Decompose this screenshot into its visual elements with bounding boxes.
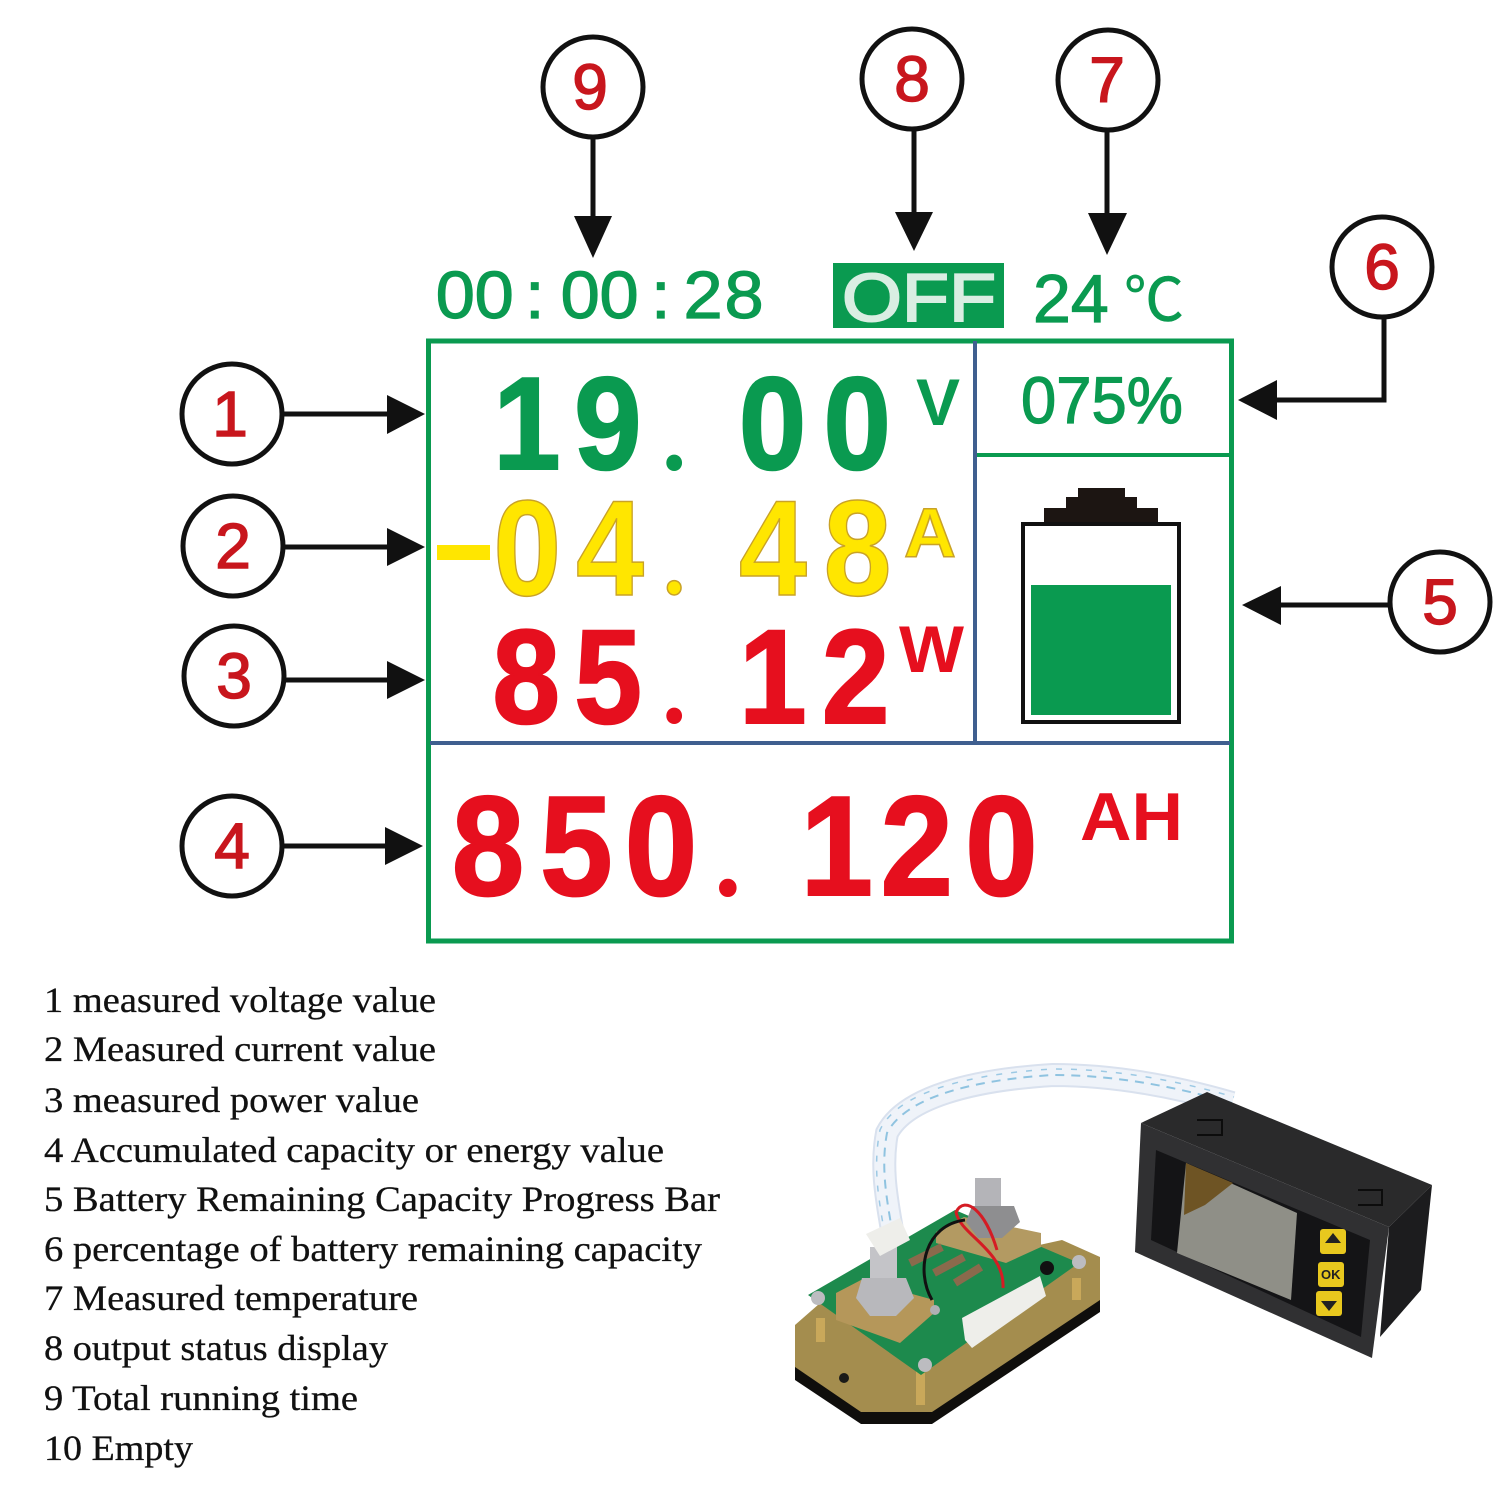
meter housing	[1135, 1092, 1432, 1358]
accumulated capacity reading: 850	[452, 766, 697, 925]
current reading: A	[904, 494, 956, 572]
callout 9 with arrow: total running time: 9	[572, 51, 608, 123]
voltage reading: .	[662, 382, 686, 491]
brass shunt with rods	[836, 1217, 1041, 1343]
status row: running time: 00:00:28	[436, 258, 764, 333]
current reading: 48	[739, 473, 892, 624]
callout 9 with arrow: total running time	[543, 37, 643, 258]
legend list: 5 Battery Remaining Capacity Progress Bar	[44, 1179, 720, 1219]
callout 7 with arrow: temperature: 7	[1089, 44, 1125, 116]
white connectors	[866, 1218, 1046, 1348]
voltage reading: 00	[739, 349, 891, 497]
legend list: 2 Measured current value	[44, 1029, 436, 1069]
callout 7 with arrow: temperature	[1058, 30, 1158, 255]
callout 5 with arrow: battery bar: 5	[1422, 566, 1458, 638]
voltage reading: 19	[493, 349, 642, 497]
callout 8 with arrow: output status: 8	[894, 43, 930, 115]
accumulated capacity reading: .	[714, 797, 742, 920]
callout 1 with arrow: voltage: 1	[212, 378, 248, 450]
callout 6 with arrow: battery percentage: 6	[1364, 231, 1400, 303]
meter buttons: OK	[1321, 1267, 1341, 1282]
legend list: 4 Accumulated capacity or energy value	[44, 1130, 664, 1170]
meter buttons	[1316, 1229, 1346, 1316]
callout 2 with arrow: current: 2	[215, 510, 251, 582]
callout 8 with arrow: output status	[862, 29, 962, 251]
callout 2 with arrow: current	[183, 496, 425, 596]
product photo illustration	[795, 1069, 1432, 1424]
power reading: W	[899, 612, 965, 686]
green circuit board	[808, 1210, 1079, 1375]
legend list	[44, 980, 720, 1468]
accumulated capacity reading: AH	[1080, 779, 1183, 855]
bolts	[856, 1178, 1020, 1316]
callout 4 with arrow: capacity	[182, 796, 423, 896]
current reading	[437, 473, 956, 624]
status row: temperature	[1033, 261, 1184, 337]
status row: temperature: ℃	[1124, 267, 1184, 334]
sensor and screws	[811, 1255, 1086, 1372]
callout 4 with arrow: capacity: 4	[214, 810, 250, 882]
legend list: 3 measured power value	[44, 1080, 419, 1120]
power reading	[492, 603, 965, 752]
voltage reading	[493, 349, 960, 497]
accumulated capacity reading	[452, 766, 1183, 925]
power reading: .	[662, 635, 686, 744]
accumulated capacity reading: 120	[800, 766, 1038, 925]
voltage reading: V	[916, 365, 960, 439]
display panel frame	[428, 341, 1232, 941]
legend list: 6 percentage of battery remaining capacity	[44, 1229, 702, 1269]
legend list: 9 Total running time	[44, 1378, 358, 1418]
ribbon cable	[877, 1069, 1234, 1236]
callout 6 with arrow: battery percentage	[1238, 217, 1432, 420]
status row: output state badge: OFF	[842, 260, 996, 336]
callout 1 with arrow: voltage	[182, 364, 425, 464]
legend list: 8 output status display	[44, 1328, 388, 1368]
battery percentage: 075%	[1021, 363, 1183, 437]
status row: temperature: 24	[1033, 261, 1109, 337]
power reading: 85	[492, 603, 642, 752]
legend list: 7 Measured temperature	[44, 1278, 418, 1318]
current reading: 04	[493, 473, 644, 624]
battery level icon	[1023, 488, 1179, 722]
power reading: 12	[739, 603, 890, 752]
callout 3 with arrow: power	[184, 626, 425, 726]
callout 5 with arrow: battery bar	[1242, 552, 1490, 652]
shunt base plate	[795, 1240, 1100, 1424]
legend list: 1 measured voltage value	[44, 980, 436, 1020]
legend list: 10 Empty	[44, 1428, 193, 1468]
jumper wires	[924, 1205, 1003, 1300]
current reading: .	[662, 507, 686, 616]
callout 3 with arrow: power: 3	[216, 640, 252, 712]
